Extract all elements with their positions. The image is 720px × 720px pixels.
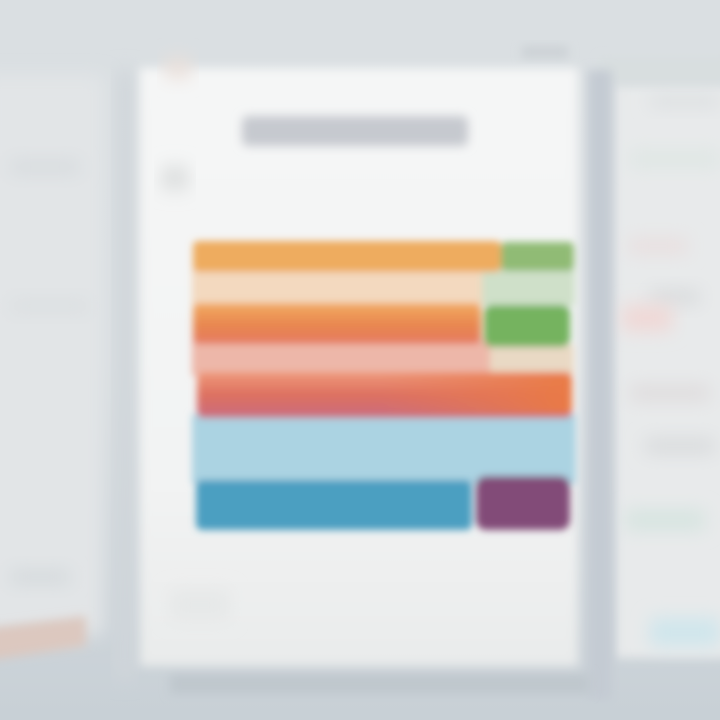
row 1 green bar [501, 242, 574, 271]
row 5 blue bar [196, 480, 472, 530]
left gutter shadow [116, 70, 134, 680]
top right tab [522, 46, 568, 58]
row 2 orange bar [193, 303, 481, 344]
top corner accent [165, 58, 191, 78]
side note [162, 166, 188, 190]
row 1 pale green band [482, 268, 575, 306]
row 3 right tint [380, 372, 572, 414]
panel: left blurred page [0, 75, 104, 635]
panel: left peach strip [0, 616, 86, 660]
bar chart [192, 241, 576, 530]
row 1 orange bar [193, 241, 501, 272]
heading [242, 116, 468, 146]
panel: right blurred page [616, 86, 720, 658]
panel: right page top band [600, 58, 720, 84]
row 2 green bar [484, 305, 570, 347]
panel: right page details [622, 95, 720, 646]
row 3 bar [197, 372, 572, 418]
row 1 pale band [192, 268, 492, 306]
row 2 pale band [192, 340, 492, 376]
footer table marks [170, 590, 230, 620]
page shadow gutter [588, 70, 612, 700]
row 2 right pale band [490, 345, 574, 375]
row 4 pale blue band [192, 414, 576, 484]
row 5 purple bar [476, 476, 570, 530]
panel: main document [140, 46, 578, 666]
bottom page shadow [170, 674, 590, 694]
